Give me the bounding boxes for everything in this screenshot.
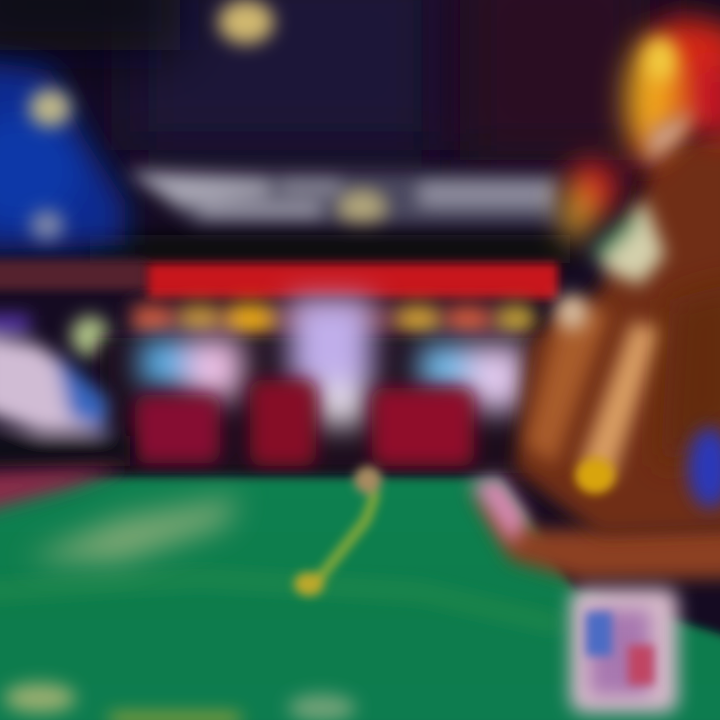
floor: green casino carpet xyxy=(0,466,720,720)
icon: yellow token xyxy=(575,458,615,494)
sign: blurred white lettering band xyxy=(125,170,560,224)
panel: dark lower wall xyxy=(100,338,560,473)
structure: wooden tower xyxy=(470,130,720,580)
row: coloured lights under the banner xyxy=(130,302,536,338)
icons: ceiling lights xyxy=(29,0,274,356)
icon: blue orb xyxy=(688,428,720,508)
object: patterned pillar xyxy=(570,588,678,713)
panel: blue left wall xyxy=(0,60,125,250)
floor marking: yellow line xyxy=(294,466,382,596)
screen: left slot machine xyxy=(0,315,130,466)
seats: red chairs xyxy=(135,380,474,466)
decoration: pink block on platform xyxy=(470,476,528,545)
banner: red stripe xyxy=(0,260,558,299)
screens: bright slot displays xyxy=(140,298,526,425)
floor marking: pale stripe xyxy=(25,497,240,562)
floor marking: bottom spots xyxy=(4,683,356,720)
flame: red and orange top xyxy=(562,15,720,243)
decoration: white and green trim xyxy=(556,38,695,330)
